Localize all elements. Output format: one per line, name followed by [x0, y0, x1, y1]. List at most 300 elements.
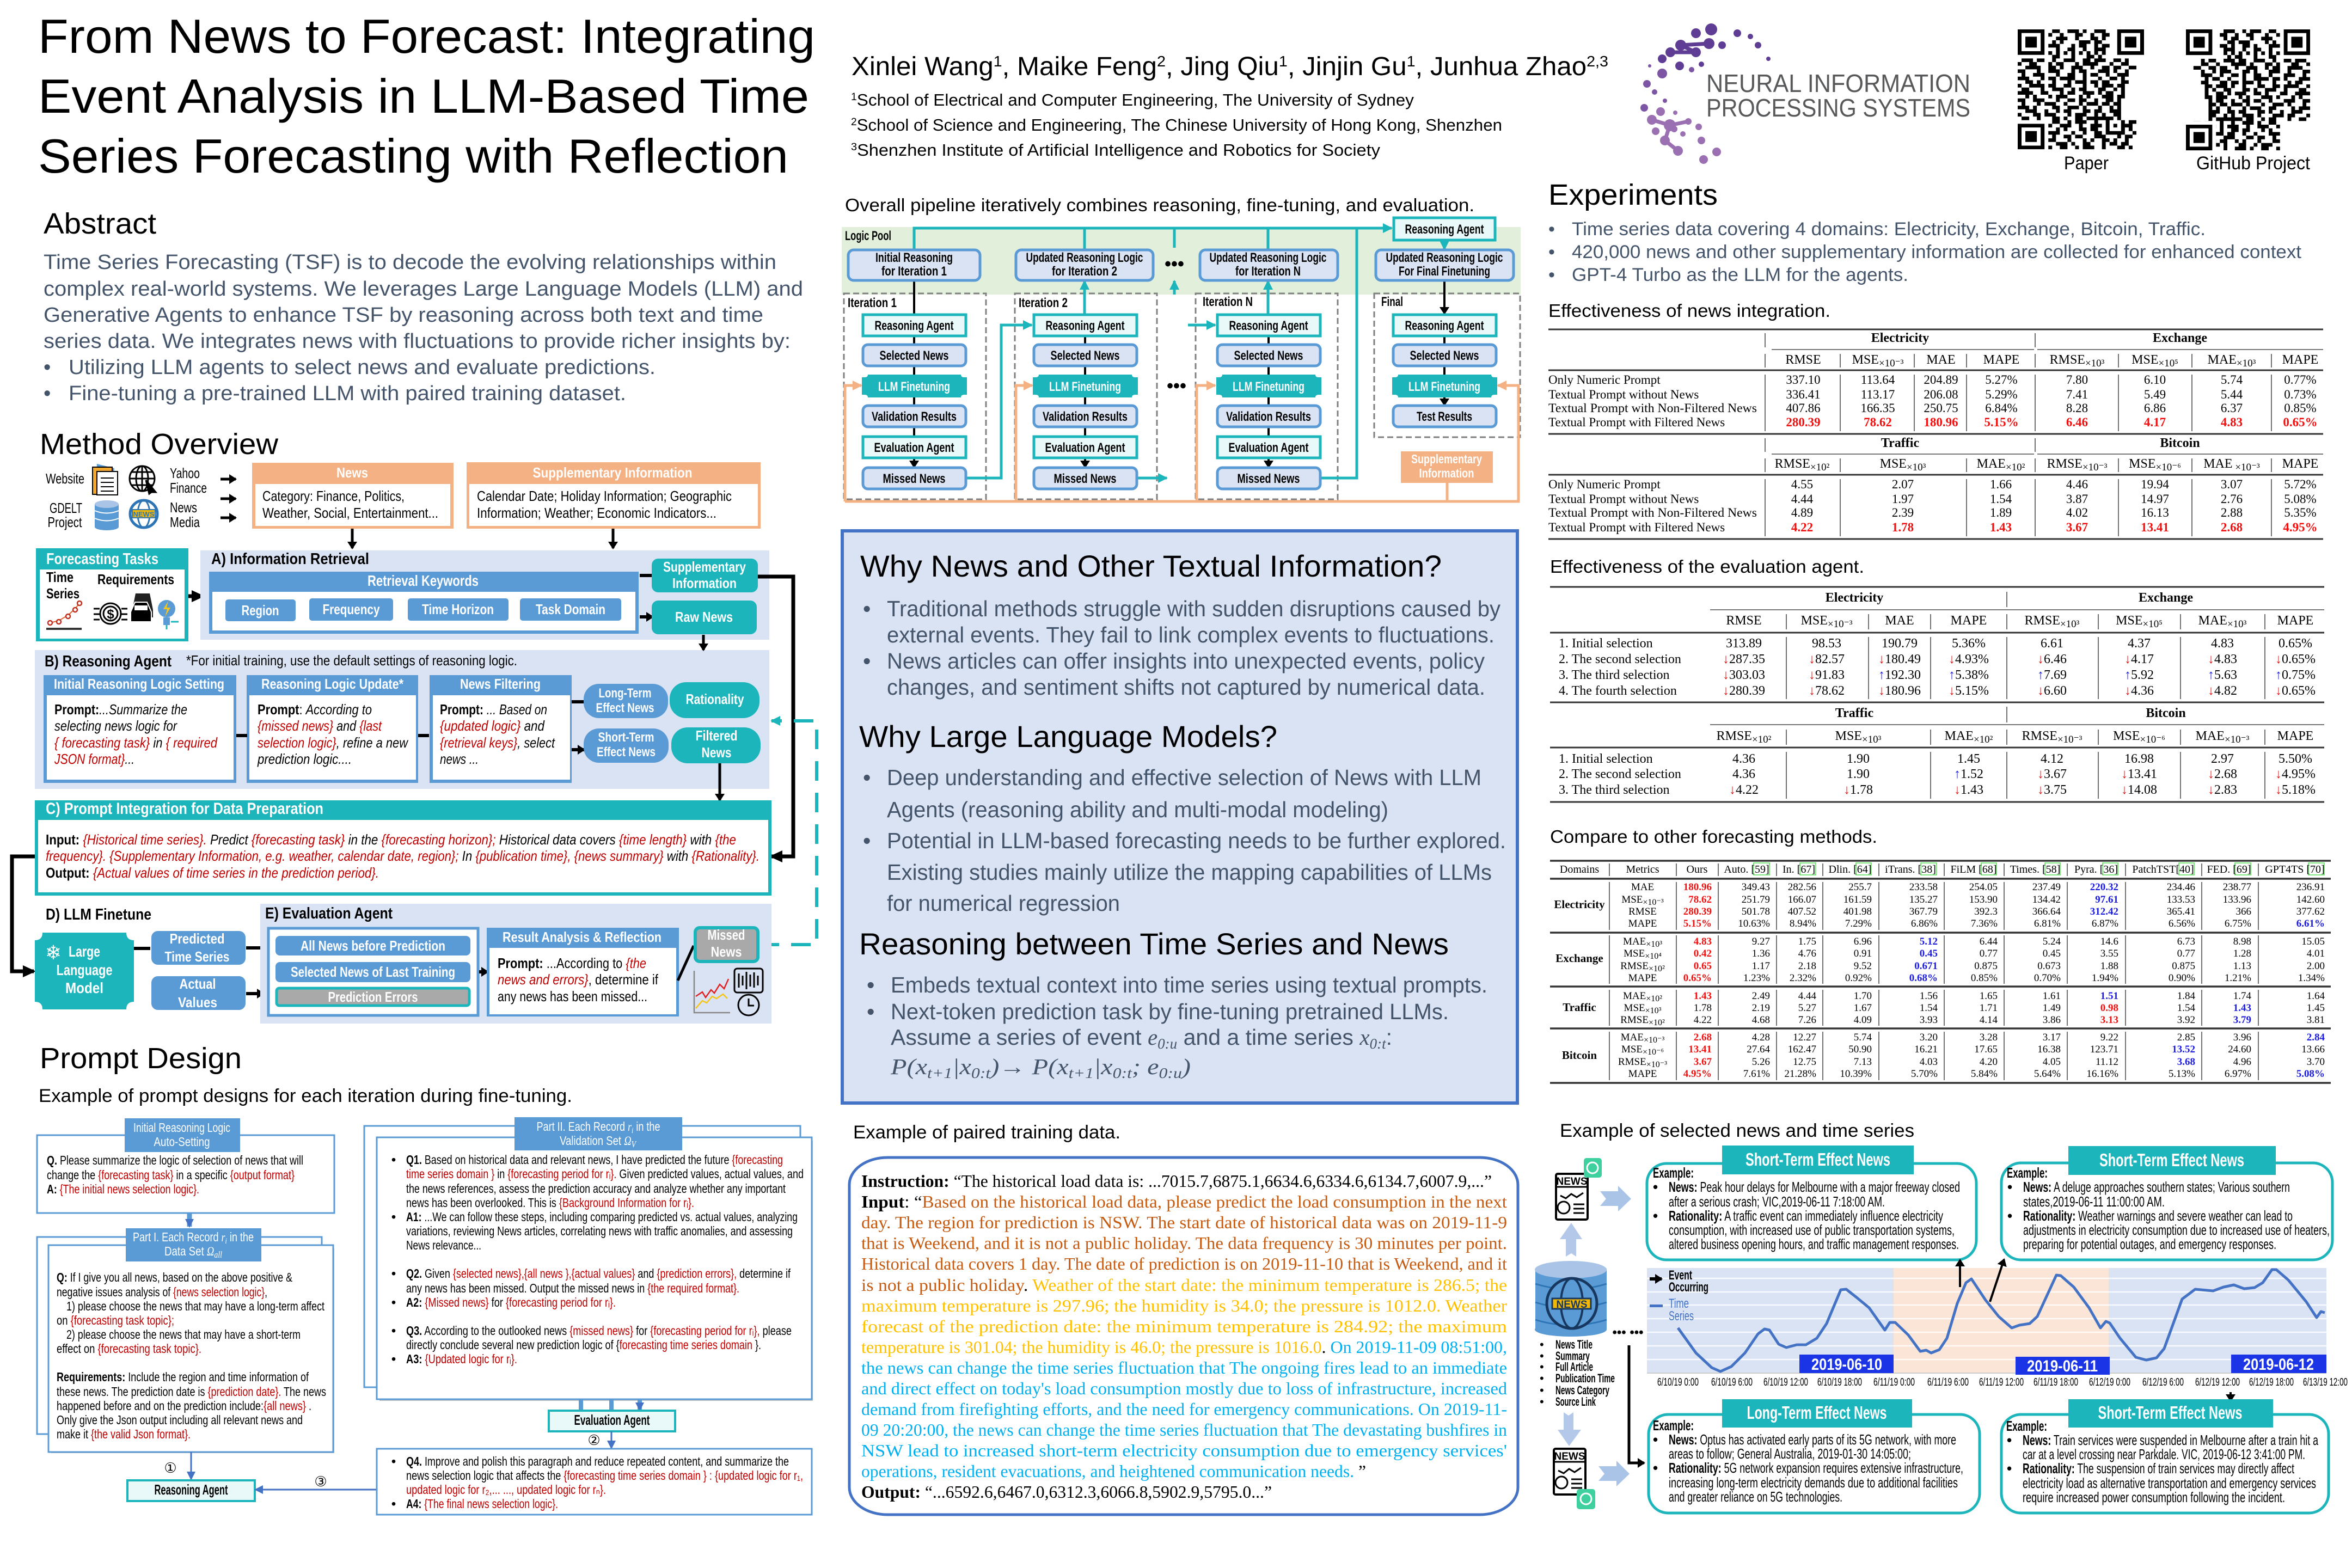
- table: effectiveness of the evaluation agent: 313.89: [1726, 636, 1762, 651]
- iteration 2 column: Selected News: [1051, 348, 1119, 363]
- part II box: [364, 1117, 813, 1401]
- retrieval keywords box: Retrieval Keywords: [367, 572, 479, 589]
- panel: long-term effect news: increasing long-term electricity demands due to additional facilities: [1669, 1474, 1958, 1491]
- part II box: A2: {Missed news} for {forecasting period for rᵢ}.: [406, 1295, 616, 1309]
- panel: short-term effect news 1: [1647, 1146, 1976, 1260]
- panel: paired training data: Output: “...6592.6,6467.0,6312.3,6066.8,5902.9,5795.0...”: [861, 1482, 1272, 1502]
- comparison values: 254.05: [1969, 881, 1998, 893]
- logic pool boxes: For Final Finetuning: [1399, 264, 1490, 279]
- comparison values: 1.56: [1920, 990, 1938, 1002]
- table: effectiveness of the evaluation agent: ↓4.82: [2208, 684, 2237, 698]
- part II box: News relevance...: [406, 1238, 481, 1252]
- comparison values: 7.36%: [1971, 918, 1998, 929]
- icon: rising time series: [46, 601, 82, 629]
- predicted time series: Time Series: [164, 948, 230, 965]
- abstract body text: Utilizing LLM agents to select news and evaluate predictions.: [69, 356, 656, 379]
- table: effectiveness of the evaluation agent: ↑5.63: [2208, 668, 2237, 682]
- table: effectiveness of news integration: ×10⁻⁶: [2155, 462, 2181, 473]
- large language model shape: [35, 933, 134, 1009]
- comparison values: 161.59: [1843, 894, 1872, 905]
- comparison values: 9.52: [1854, 960, 1872, 972]
- table: effectiveness of the evaluation agent: ×10²: [1974, 734, 1993, 745]
- arrow: raw news to reasoning agent: [702, 635, 705, 650]
- logic pool boxes: for Iteration 1: [881, 264, 947, 279]
- short-term effect news pill: [584, 728, 669, 763]
- supplementary information box: [1401, 451, 1493, 483]
- part II box: Q2. Given {selected news},{all news },{actual values} and {prediction errors}, determine if: [406, 1266, 791, 1281]
- date tags: [1799, 1355, 2326, 1375]
- retrieval keywords box: Frequency: [322, 601, 380, 617]
- heading: reasoning: Reasoning between Time Series and News: [859, 927, 1449, 961]
- news field list: •: [1540, 1338, 1544, 1351]
- table: effectiveness of the evaluation agent: 2. The second selection: [1559, 652, 1681, 666]
- date tags: 2019-06-12: [2243, 1356, 2314, 1374]
- table: effectiveness of the evaluation agent: ↓3.75: [2037, 783, 2067, 797]
- table: effectiveness of news integration: Exchange: [2153, 331, 2207, 345]
- news field list: News Title: [1555, 1338, 1592, 1351]
- comparison values: 4.05: [2043, 1056, 2061, 1068]
- comparison values: 7.29%: [1845, 918, 1872, 929]
- table: effectiveness of news integration: MAPE: [1983, 353, 2019, 367]
- iteration 2 column: Evaluation Agent: [1045, 440, 1125, 455]
- logo: neural information processing systems: [1640, 23, 1970, 164]
- affiliations: School of Science and Engineering, The Chinese University of Hong Kong, Shenzhen: [857, 115, 1502, 134]
- table: effectiveness of news integration: ×10²: [2006, 462, 2025, 473]
- time axis labels: 6/10/19 18:00: [1817, 1376, 1862, 1388]
- table: effectiveness of the evaluation agent: ↓287.35: [1723, 652, 1765, 666]
- part I box: [37, 1228, 334, 1453]
- news and errors inputs: Selected News of Last Training: [291, 964, 455, 980]
- iteration dashed frames: Iteration 2: [1019, 296, 1068, 310]
- table: effectiveness of news integration: MSE: [2129, 457, 2181, 473]
- comparison values: 5.27: [1798, 1002, 1816, 1014]
- part II box: in the: [633, 1119, 660, 1134]
- comparison values: 2.68: [1694, 1032, 1712, 1043]
- metric names: RMSE: [1628, 906, 1657, 917]
- table: effectiveness of the evaluation agent: ↓5.18%: [2275, 783, 2316, 797]
- comparison values: 0.98: [2100, 1002, 2118, 1014]
- arrow 3 back to reasoning agent: ③: [314, 1474, 327, 1490]
- icon: news globe: [130, 500, 157, 528]
- metric names: ×10⁻³: [1644, 1036, 1664, 1045]
- logic pool boxes: Updated Reasoning Logic: [1210, 250, 1326, 265]
- icon: news database: [1535, 1261, 1607, 1337]
- initial reasoning logic auto-setting: Auto-Setting: [154, 1135, 210, 1149]
- supplementary information box: Supplementary Information: [532, 464, 693, 481]
- table: effectiveness of news integration: 180.96: [1924, 415, 1958, 429]
- table: effectiveness of news integration: 3.67: [2066, 520, 2088, 534]
- comparison values: 1.34%: [2298, 972, 2325, 984]
- missed news: [695, 927, 758, 961]
- table: effectiveness of the evaluation agent: ↓4.17: [2124, 652, 2154, 666]
- long-term effect news pill: Long-Term: [599, 686, 651, 701]
- table: effectiveness of news integration: ×10⁻³: [2233, 462, 2260, 473]
- time axis labels: 6/11/19 0:00: [1873, 1376, 1915, 1388]
- comparison values: 6.44: [1980, 936, 1998, 947]
- comparison values: 0.77: [2177, 948, 2195, 959]
- heading: experiments: Experiments: [1548, 179, 1718, 211]
- table: effectiveness of news integration: MAPE: [2282, 353, 2318, 367]
- table: effectiveness of news integration: Only Numeric Prompt: [1548, 477, 1661, 491]
- panel: short-term effect news 2: [2001, 1146, 2332, 1260]
- predicted time series: [151, 930, 246, 965]
- table: effectiveness of news integration: 4.17: [2144, 415, 2166, 429]
- comparison values: 0.91: [1854, 948, 1872, 959]
- metric names: ×10⁴: [1645, 952, 1662, 961]
- supplementary information pill: Information: [672, 575, 737, 591]
- metric names: ×10⁻⁶: [1643, 1048, 1664, 1057]
- missed news: Missed: [708, 927, 745, 943]
- comparison values: 1.51: [2100, 990, 2118, 1002]
- supplementary information pill: Supplementary: [663, 559, 746, 575]
- metric names: MSE: [1621, 1044, 1643, 1055]
- QR code: paper: [2018, 29, 2144, 174]
- question 4 box: A4: {The final news selection logic}.: [406, 1497, 558, 1511]
- retrieval keywords box: [209, 572, 639, 634]
- legend: Occurring: [1669, 1280, 1708, 1295]
- comparison values: 0.92%: [1845, 972, 1872, 984]
- table: effectiveness of news integration: 337.10: [1786, 373, 1821, 387]
- panel: short-term effect news 3: •: [2007, 1460, 2012, 1477]
- table: effectiveness of the evaluation agent: 2. The second selection: [1559, 767, 1681, 781]
- table: effectiveness of the evaluation agent: ↓1.43: [1954, 783, 1983, 797]
- table: effectiveness of news integration: MAE: [1977, 457, 2025, 473]
- bullets: reasoning: Next-token prediction task by fine-tuning pretrained LLMs.: [891, 999, 1449, 1024]
- iteration 1 column: Evaluation Agent: [874, 440, 954, 455]
- table: effectiveness of the evaluation agent: 98.53: [1812, 636, 1841, 651]
- news filtering: {retrieval keys}, select: [440, 734, 555, 751]
- table: effectiveness of news integration: Textual Prompt without News: [1548, 388, 1699, 401]
- news field list: Full Article: [1555, 1360, 1593, 1374]
- iteration 2 column: Reasoning Agent: [1045, 318, 1125, 333]
- question 4 box: •: [391, 1497, 396, 1511]
- comparison values: 1.74: [2233, 990, 2252, 1002]
- initial reasoning logic setting: Initial Reasoning Logic Setting: [54, 676, 224, 692]
- table: effectiveness of news integration: 5.08%: [2284, 492, 2317, 506]
- iteration N column: Evaluation Agent: [1228, 440, 1309, 455]
- title: Event Analysis in LLM-Based Time: [38, 69, 809, 123]
- table: effectiveness of news integration: 5.29%: [1985, 388, 2018, 401]
- metric names: MAE: [1623, 990, 1646, 1002]
- comparison values: 6.87%: [2092, 918, 2118, 929]
- table: effectiveness of the evaluation agent: RMSE: [2022, 729, 2082, 745]
- abstract body text: •: [44, 356, 51, 379]
- part II box: Q1. Based on historical data and relevant news, I have predicted the future {forecasting: [406, 1153, 783, 1167]
- table: effectiveness of the evaluation agent: 1. Initial selection: [1559, 636, 1653, 651]
- question 4 box: Q4. Improve and polish this paragraph and reduce repeated content, and summarize the: [406, 1454, 789, 1468]
- table: effectiveness of news integration: 0.65%: [2283, 415, 2318, 429]
- bullets: reasoning: [867, 972, 1487, 1081]
- comparison values: 4.09: [1854, 1014, 1872, 1026]
- comparison values: 1.54: [2177, 1002, 2195, 1014]
- initial reasoning logic setting: [44, 675, 236, 783]
- panel: short-term effect news 2: Short-Term Effect News: [2099, 1150, 2244, 1170]
- table: effectiveness of the evaluation agent: 1.45: [1957, 752, 1980, 766]
- bullets: reasoning: |x: [1094, 1054, 1113, 1079]
- comparison values: 1.21%: [2225, 972, 2251, 984]
- supplementary information box: Information: [1419, 466, 1474, 480]
- comparison values: 5.64%: [2034, 1068, 2061, 1080]
- comparison values: 1.64: [2307, 990, 2325, 1002]
- comparison values: 0.90%: [2169, 972, 2195, 984]
- data sources row: Yahoo: [170, 465, 200, 481]
- table: effectiveness of news integration: RMSE: [1785, 353, 1821, 367]
- table: effectiveness of news integration: Bitcoin: [2160, 436, 2200, 450]
- comparison values: 135.27: [1909, 894, 1938, 905]
- comparison values: 234.46: [2167, 881, 2195, 893]
- bullets: why LLMs: •: [863, 765, 871, 790]
- large language model shape: Model: [65, 979, 103, 996]
- table: effectiveness of news integration: 0.77%: [2284, 373, 2317, 387]
- table: effectiveness of news integration: 4.89: [1791, 506, 1813, 519]
- part II box: Q3. According to the outlooked news {missed news} for {forecasting period for rᵢ}, please: [406, 1324, 792, 1338]
- table: effectiveness of news integration: 113.17: [1861, 388, 1895, 401]
- panel: why news, LLMs, reasoning: [842, 531, 1517, 1103]
- bullets: reasoning: x: [1359, 1025, 1370, 1050]
- panel: long-term effect news: Rationality: 5G network expansion requires extensive infrastructure,: [1669, 1460, 1963, 1476]
- metric names: RMSE: [1618, 1056, 1646, 1068]
- panel: C prompt integration: Output: {Actual values of time series in the prediction period}.: [46, 865, 379, 881]
- table: effectiveness of the evaluation agent: 1. Initial selection: [1559, 752, 1653, 766]
- news filtering: news ...: [440, 751, 479, 767]
- table: effectiveness of news integration: Electricity: [1871, 331, 1929, 345]
- table: effectiveness of news integration: MAPE: [2282, 457, 2318, 471]
- iteration dashed frames: [844, 293, 1520, 499]
- icon: documents: [93, 464, 118, 495]
- news field list: •: [1540, 1360, 1544, 1374]
- domain labels: Electricity: [1554, 898, 1605, 911]
- pipeline caption: Overall pipeline iteratively combines reasoning, fine-tuning, and evaluation.: [845, 195, 1474, 215]
- domain labels: [1554, 898, 1605, 1062]
- table: effectiveness of the evaluation agent: ↓180.96: [1878, 684, 1921, 698]
- part II box: •: [391, 1210, 396, 1224]
- domain labels: Exchange: [1555, 952, 1603, 965]
- panel: long-term effect news: •: [1653, 1460, 1658, 1476]
- comparison values: 0.875: [2172, 960, 2195, 972]
- comparison values: 13.66: [2301, 1044, 2325, 1055]
- bullets: reasoning: P(x: [891, 1054, 922, 1079]
- heading: method overview: Method Overview: [40, 428, 279, 461]
- arrow 2 to question 4: [587, 1431, 611, 1449]
- table: effectiveness of news integration: 4.83: [2221, 415, 2243, 429]
- panel: paired training data: NSW lead to increased short-term electricity consumption due to emergency services': [861, 1441, 1507, 1460]
- panel: paired training data: temperature is 301.04; the humidity is 46.0; the pressure is 1016.0. On 2019-11-09 08:51:00,: [861, 1337, 1507, 1357]
- metric names: ×10²: [1646, 994, 1662, 1003]
- news and errors inputs: All News before Prediction: [301, 938, 445, 954]
- panel: paired training data: the news can change the time series fluctuation that The ongoing fires lead to an immediate: [861, 1358, 1507, 1377]
- panel: short-term effect news 2: •: [2007, 1208, 2012, 1224]
- table: effectiveness of news integration: MSE: [2132, 353, 2178, 369]
- bullets: why LLMs: [863, 765, 1506, 916]
- table: comparison with other forecasting methods: Pyra. [36]: [2074, 863, 2118, 875]
- table: effectiveness of the evaluation agent: RMSE: [1717, 729, 1772, 745]
- question 4 box: news selection logic that affects the {forecasting time series domain } : {updated logic for r₁,: [406, 1468, 803, 1483]
- table: comparison with other forecasting methods: GPT4TS [70]: [2265, 863, 2325, 875]
- icon: generated news bottom: NEWS: [1554, 1451, 1585, 1462]
- comparison values: 1.67: [1854, 1002, 1872, 1014]
- table: effectiveness of the evaluation agent: ↓14.08: [2121, 783, 2157, 797]
- time axis labels: 6/12/19 6:00: [2142, 1376, 2184, 1388]
- table: effectiveness of the evaluation agent: ×10³: [2227, 618, 2247, 630]
- comparison values: 0.875: [1974, 960, 1998, 972]
- table: effectiveness of the evaluation agent: MSE: [2116, 614, 2163, 630]
- comparison values: 367.79: [1909, 906, 1938, 917]
- bullets: reasoning: |x: [952, 1054, 971, 1079]
- chart: time series with event window: [1647, 1268, 2348, 1388]
- table: effectiveness of the evaluation agent: Bitcoin: [2146, 706, 2186, 720]
- legend: Time: [1669, 1296, 1689, 1311]
- table: effectiveness of news integration: 5.72%: [2284, 477, 2317, 491]
- news filtering: [430, 675, 572, 783]
- long-term effect news pill: [584, 684, 668, 718]
- date tags: 2019-06-10: [1811, 1356, 1882, 1374]
- part II box: variations, reviewing News articles, correlating news with traffic anomalies, and assessing: [406, 1224, 793, 1238]
- initial reasoning logic setting: { forecasting task} in { required: [54, 734, 218, 751]
- chart: overall pipeline diagram: [842, 218, 1521, 501]
- news field list: Summary: [1555, 1349, 1590, 1363]
- table: effectiveness of the evaluation agent: ↓4.36: [2124, 684, 2154, 698]
- rationality pill: Rationality: [686, 691, 744, 707]
- bullets: reasoning: •: [867, 999, 874, 1024]
- bullets: why LLMs: Deep understanding and effective selection of News with LLM: [887, 765, 1481, 790]
- predicted time series: Predicted: [170, 930, 224, 947]
- comparison values: 7.13: [1854, 1056, 1872, 1068]
- bullets: why news: •: [863, 596, 871, 621]
- metric names: RMSE: [1620, 960, 1649, 972]
- evaluation agent box: [549, 1411, 675, 1431]
- comparison values: 5.12: [1920, 936, 1938, 947]
- metric names: MAPE: [1628, 918, 1657, 929]
- table: effectiveness of news integration: 4.44: [1791, 492, 1814, 506]
- table: effectiveness of the evaluation agent: 4. The fourth selection: [1559, 684, 1677, 698]
- panel: D LLM finetune: D) LLM Finetune: [46, 906, 151, 923]
- table: effectiveness of the evaluation agent: [1550, 587, 2324, 802]
- comparison values: 5.26: [1752, 1056, 1770, 1068]
- arrow 1 to reasoning agent: ①: [164, 1460, 177, 1477]
- comparison values: 10.63%: [1738, 918, 1770, 929]
- caption: paired training data: Example of paired training data.: [853, 1122, 1120, 1143]
- logic pool boxes: •••: [1165, 254, 1184, 274]
- logic pool boxes: Updated Reasoning Logic: [1026, 250, 1143, 265]
- comparison values: 6.73: [2177, 936, 2195, 947]
- table: effectiveness of news integration: ×10⁻³: [2082, 462, 2108, 473]
- comparison values: 0.673: [2037, 960, 2061, 972]
- black flow arrows: [914, 280, 1444, 467]
- panel: paired training data: 09 20:20:00, the news can change the time series fluctuation that The devastating bushfires in: [861, 1420, 1507, 1440]
- table: effectiveness of the evaluation agent: 1.90: [1847, 767, 1870, 781]
- table: effectiveness of the evaluation agent: 3. The third selection: [1559, 783, 1670, 797]
- iteration 2 column: [1033, 315, 1138, 489]
- table: effectiveness of news integration: 4.95%: [2283, 520, 2318, 534]
- table: effectiveness of news integration: MAE: [2208, 353, 2256, 369]
- initial reasoning logic auto-setting: change the {forecasting task} in a specific {output format}: [47, 1168, 295, 1182]
- orange supplementary connectors: [845, 385, 1518, 501]
- comparison values: 133.96: [2223, 894, 2251, 905]
- part II box: •: [391, 1352, 396, 1366]
- table: comparison with other forecasting methods: Ours: [1687, 863, 1708, 875]
- table: effectiveness of the evaluation agent: ×10²: [1752, 734, 1772, 745]
- table: effectiveness of the evaluation agent: ↓13.41: [2121, 767, 2157, 781]
- comparison values: 153.90: [1969, 894, 1998, 905]
- panel: B reasoning agent: B) Reasoning Agent: [45, 653, 171, 670]
- panel: paired training data: is not a public holiday . Weather of the start date: the minimum temperature is 286.5; the: [861, 1275, 1507, 1295]
- table: effectiveness of news integration: 4.22: [1791, 520, 1813, 534]
- panel: short-term effect news 1: •: [1653, 1208, 1658, 1224]
- final column: Selected News: [1410, 348, 1479, 363]
- title: [38, 9, 815, 183]
- bullets: reasoning: :: [1386, 1025, 1392, 1050]
- result analysis and reflection: Result Analysis & Reflection: [503, 929, 661, 945]
- panel: forecasting tasks: [36, 548, 188, 641]
- table: effectiveness of the evaluation agent: ↑5.92: [2124, 668, 2154, 682]
- table: effectiveness of news integration: 1.78: [1892, 520, 1914, 534]
- panel: long-term effect news: [1649, 1399, 1980, 1513]
- table: effectiveness of the evaluation agent: MAPE: [2277, 729, 2313, 743]
- table: effectiveness of news integration: 6.10: [2144, 373, 2166, 387]
- panel: paired training data: Input: “Based on the historical load data, please predict the load consumption in the next: [861, 1192, 1507, 1211]
- comparison values: 4.22: [1694, 1014, 1712, 1026]
- table: effectiveness of the evaluation agent: ↑0.75%: [2275, 668, 2316, 682]
- table: effectiveness of the evaluation agent: ↑5.38%: [1949, 668, 1989, 682]
- authors: 1: [1407, 53, 1416, 70]
- domain labels: Traffic: [1563, 1001, 1596, 1014]
- part I box: happened before and on the prediction include:{all news} .: [57, 1399, 311, 1413]
- table: comparison with other forecasting methods: In. [67]: [1783, 863, 1815, 875]
- bullets: reasoning: ; e: [1132, 1054, 1159, 1079]
- comparison values: 312.42: [2090, 906, 2118, 917]
- data sources row: News: [170, 499, 197, 516]
- supplementary information box: Calendar Date; Holiday Information; Geographic: [477, 488, 732, 504]
- abstract heading: Abstract: [44, 207, 156, 240]
- comparison values: 6.81%: [2034, 918, 2061, 929]
- part II box: A3: {Updated logic for rᵢ}.: [406, 1352, 517, 1366]
- table: effectiveness of the evaluation agent: ↓180.49: [1878, 652, 1921, 666]
- experiments bullets: •: [1548, 219, 1555, 240]
- comparison values: 17.65: [1974, 1044, 1998, 1055]
- comparison values: 7.61%: [1743, 1068, 1770, 1080]
- affiliations: 1: [851, 91, 857, 103]
- table: effectiveness of news integration: 13.41: [2141, 520, 2169, 534]
- time axis labels: 6/12/19 18:00: [2249, 1376, 2294, 1388]
- table: effectiveness of the evaluation agent: ↑1.52: [1954, 767, 1983, 781]
- iteration N column: LLM Finetuning: [1233, 379, 1304, 394]
- table: effectiveness of the evaluation agent: 1.90: [1847, 752, 1870, 766]
- table: effectiveness of news integration: RMSE: [2047, 457, 2108, 473]
- metric names: MAE: [1631, 881, 1654, 893]
- panel: long-term effect news: Long-Term Effect News: [1747, 1402, 1887, 1423]
- comparison values: 0.45: [2043, 948, 2061, 959]
- part II box: news has been overlooked. This is {Background Information for rᵢ}.: [406, 1196, 694, 1210]
- comparison values: 1.36: [1752, 948, 1770, 959]
- experiments bullets: •: [1548, 265, 1555, 285]
- table: effectiveness of the evaluation agent: ↓4.95%: [2275, 767, 2316, 781]
- initial reasoning logic setting: selecting news logic for: [54, 718, 177, 734]
- table: effectiveness of news integration: Textual Prompt with Non-Filtered News: [1548, 401, 1757, 415]
- actual values: Actual: [180, 976, 216, 992]
- table: effectiveness of the evaluation agent: 6.61: [2041, 636, 2063, 651]
- time axis labels: 6/12/19 0:00: [2089, 1376, 2130, 1388]
- data sources row: Website: [46, 470, 84, 487]
- comparison values: 238.77: [2223, 881, 2251, 893]
- bullets: reasoning: 0:u: [1159, 1065, 1182, 1081]
- panel: C prompt integration: frequency}. {Supplementary Information, e.g. weather, calendar date, region}; In {publication time}, {news summary} with {Rationality}.: [46, 848, 759, 864]
- comparison values: 8.98: [2233, 936, 2251, 947]
- affiliations: School of Electrical and Computer Engineering, The University of Sydney: [857, 90, 1414, 109]
- table: effectiveness of news integration: 2.07: [1892, 477, 1914, 491]
- panel: C prompt integration: Input: {Historical time series}. Predict {forecasting task} in the {forecasting horizon}; Historical data covers {time length} with {the: [46, 831, 736, 848]
- authors: , Maike Feng: [1002, 52, 1157, 81]
- table: effectiveness of news integration: 1.43: [1990, 520, 2012, 534]
